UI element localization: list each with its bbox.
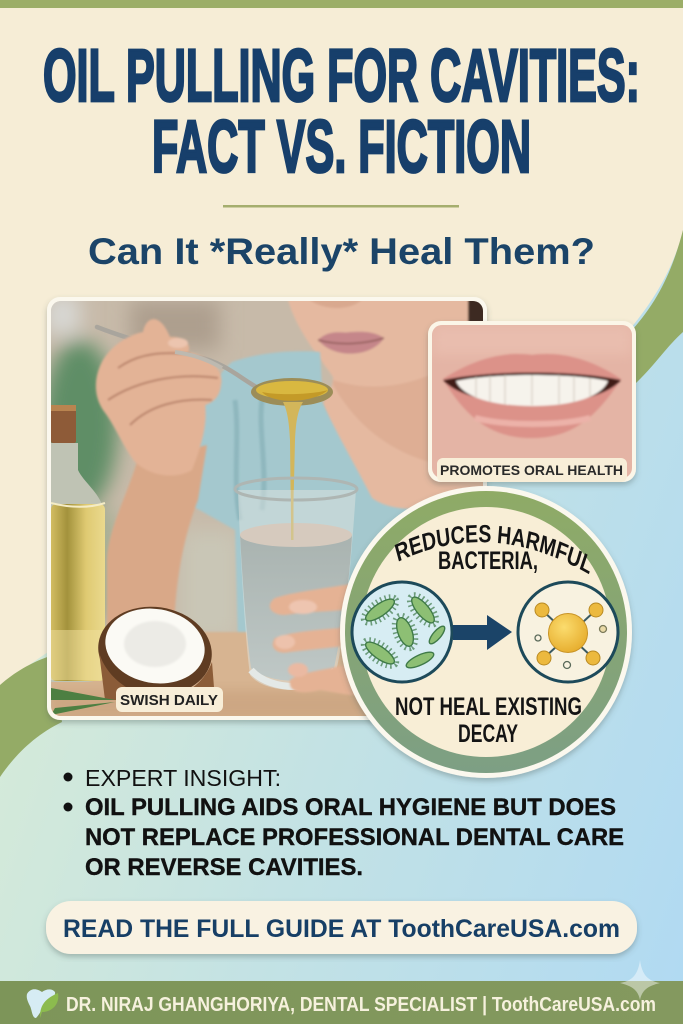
badge text: bacteria: BACTERIA, — [438, 547, 538, 575]
badge text: not heal existing decay: NOT HEAL EXISTING — [395, 693, 582, 721]
table — [51, 631, 366, 716]
spoon handle over hand — [175, 352, 222, 368]
subtitle: Can It *Really* Heal Them? — [88, 231, 595, 272]
woman's face and chest — [287, 296, 490, 510]
badge text: not heal existing decay — [395, 693, 582, 748]
icon: bacteria — [352, 582, 452, 682]
panel: main photo — [42, 295, 490, 722]
badge curved text: REDUCES HARMFUL — [394, 524, 590, 574]
expert insight text block: NOT REPLACE PROFESSIONAL DENTAL CARE — [85, 824, 624, 851]
icon: tooth logo — [27, 989, 58, 1018]
label: swish daily — [116, 687, 223, 712]
footer band — [0, 960, 683, 1024]
arrow — [453, 615, 512, 650]
lips — [443, 354, 621, 438]
coconut — [98, 606, 214, 700]
icon: sparkle — [620, 960, 660, 1000]
raised hand — [96, 319, 222, 476]
top band — [0, 0, 683, 8]
expert insight text block: OIL PULLING AIDS ORAL HYGIENE BUT DOES — [85, 794, 616, 821]
photo background blur — [51, 301, 236, 631]
panel: bacteria badge — [338, 486, 635, 784]
other hand — [269, 584, 354, 696]
expert insight text block — [64, 765, 624, 881]
divider — [223, 205, 459, 208]
call to action pill — [46, 901, 637, 954]
spoon — [97, 327, 333, 525]
label: swish daily: SWISH DAILY — [120, 692, 218, 709]
label: promotes oral health — [437, 458, 627, 482]
expert insight text block: EXPERT INSIGHT: — [85, 765, 281, 791]
label: promotes oral health: PROMOTES ORAL HEALTH — [440, 462, 623, 478]
palm leaves — [51, 688, 115, 715]
panel: smile photo — [428, 321, 636, 482]
swoosh: top right — [600, 230, 683, 383]
icon: healthy molecule — [518, 582, 618, 682]
teeth — [456, 375, 608, 406]
call to action pill: READ THE FULL GUIDE AT ToothCareUSA.com — [63, 915, 620, 943]
badge text: not heal existing decay: DECAY — [458, 720, 518, 748]
expert insight text block: OR REVERSE CAVITIES. — [85, 854, 363, 881]
title — [43, 34, 640, 188]
forearm — [107, 445, 207, 640]
shirt — [195, 350, 408, 633]
glass of water — [235, 478, 357, 690]
oil bottle — [51, 405, 105, 682]
swoosh: bottom left — [0, 656, 62, 777]
